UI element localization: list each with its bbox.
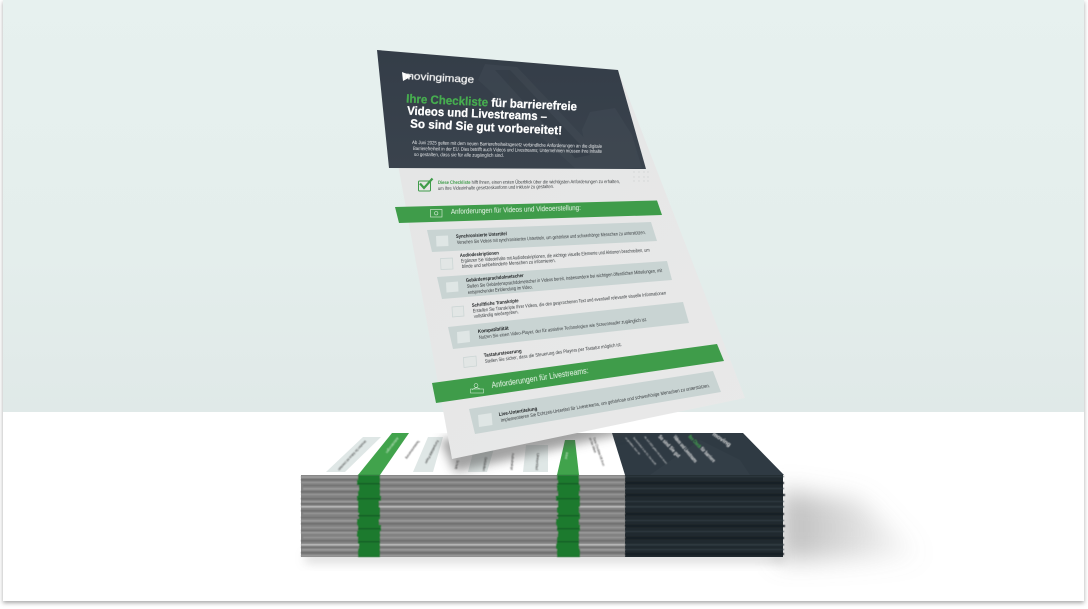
row: Kompatibilität: Nutzen Sie einen Video-Player, der für assistive Technologien wie Screenreader zugänglich ist. (479, 317, 647, 341)
row: Synchronisierte Untertitel (427, 222, 657, 252)
row: Schriftliche Transkripte: Erstellen Sie Transkripte Ihrer Videos, die den gesprochenen Text und eventuell relevante visuelle Informationen (473, 290, 667, 314)
row: Kompatibilität: Kompatibilität (478, 326, 509, 335)
paper stack (300, 433, 786, 558)
section band: videos (395, 200, 662, 223)
dark cover rotated text (624, 432, 732, 466)
intro paragraph (412, 140, 602, 159)
dark cover stripes (625, 476, 784, 550)
row: Live-Untertitelung (469, 371, 721, 434)
row: Tastatursteuerung: Stellen Sie sicher, dass die Steuerung des Players per Tastatur möglich ist. (485, 342, 622, 365)
dark cover rotated text: Ab Juni 2025 gelten mit dem neuen (643, 435, 669, 465)
row: Schriftliche Transkripte: Schriftliche Transkripte (472, 298, 519, 309)
top sheet rotated text: Untertitel (534, 453, 540, 470)
headline (406, 92, 578, 137)
header background image (478, 64, 642, 168)
dark cover rotated text: Barrierefreiheit in der EU. Dies betrifft (632, 436, 657, 466)
logo: movingimage (404, 70, 475, 86)
checklist intro text: um Ihre Videoinhalte gesetzeskonform und inklusiv zu gestalten. (438, 184, 554, 192)
top sheet rows (326, 437, 548, 472)
checkbox (478, 413, 492, 427)
row: Kompatibilität (448, 302, 689, 349)
stack top sheet: Anford (564, 452, 569, 459)
stack top sheet (326, 433, 784, 475)
top sheet rotated text (337, 437, 606, 471)
wall (3, 0, 1084, 412)
flyer header (377, 50, 646, 169)
floor shadows (305, 490, 925, 563)
checkbox (457, 330, 470, 344)
checkbox (464, 356, 476, 368)
flyer (377, 50, 745, 459)
dots decoration (633, 171, 649, 182)
row: Tastatursteuerung: Tastatursteuerung (484, 348, 522, 359)
headline: Videos und Livestreams – (407, 104, 548, 123)
row: Live-Untertitelung: Live-Untertitelung (498, 406, 538, 418)
top sheet rotated text: Versehen Sie Videos mit Untertiteln (337, 439, 367, 471)
dark cover rotated text: moving (711, 432, 732, 449)
row: Live-Untertitelung: Implementieren Sie Echtzeit-Untertitel für Livestreams, um gehörlose und schwerhörige Menschen zu unterstützen. (500, 383, 710, 424)
dark cover on top sheet (612, 433, 784, 475)
top sheet rotated text: Tastatursteuerung (405, 439, 420, 460)
top sheet rotated text: Gebärden (482, 457, 488, 471)
row: Synchronisierte Untertitel: Synchronisierte Untertitel (456, 231, 508, 240)
intro paragraph: Barrierefreiheit in der EU. Dies betrifft auch Videos und Livestreams; Unternehmen müssen ihre Inhalte (413, 146, 602, 155)
stack top sheet: Anforderungen (385, 436, 399, 454)
section band: livestreams: Anforderungen für Livestreams: (491, 366, 589, 390)
checkbox (440, 258, 453, 270)
icon: video screen (430, 210, 442, 217)
flyer shadow on stack (436, 433, 614, 475)
flyer paper (377, 50, 745, 459)
row: Audiodeskriptionen: Ergänzen Sie Videoinhalte mit Audiodeskriptionen, die wichtige visuelle Elemente und Aktionen beschreiben, um (461, 248, 650, 264)
icon: green checkbox (418, 178, 432, 191)
floor (3, 412, 1084, 601)
top sheet green bands (358, 433, 579, 475)
row: Tastatursteuerung (464, 342, 622, 368)
dark cover rotated text: Videos und Livestreams (671, 434, 698, 464)
row: Gebärdensprachdolmetscher (437, 261, 672, 299)
row: Gebärdensprachdolmetscher: Stellen Sie Gebärdensprachdolmetscher in Videos bereit, insbesondere bei wichtigen öffentlichen Mitteilungen, mit (467, 268, 663, 290)
top sheet rotated text: Schrift (454, 460, 460, 470)
top sheet rotated text: Kompatibilität Player (424, 440, 440, 465)
row: Schriftliche Transkripte: vollständig wiedergeben. (474, 309, 519, 320)
logo play icon (402, 72, 412, 81)
row: Synchronisierte Untertitel: Versehen Sie Videos mit synchronisierten Untertiteln, um gehörlose und schwerhörige Menschen zu unterstützen. (457, 230, 646, 246)
dark cover rotated text: Ihre Check (687, 434, 702, 450)
top sheet rotated text: Audiodeskript (510, 453, 515, 470)
checkbox (452, 306, 464, 317)
green band edge 1 (357, 475, 381, 557)
dark cover rotated text: für barriere (699, 446, 716, 464)
checkbox (446, 282, 458, 292)
row: Audiodeskriptionen (440, 248, 650, 270)
checklist intro text (438, 178, 620, 192)
top sheet rotated text: Diese Checkliste hilft Ihnen (592, 437, 606, 467)
section band: livestreams (432, 344, 724, 403)
dark cover rotated text: so gestalten, dass sie (624, 436, 642, 456)
page edge stripes (301, 475, 785, 557)
checkbox (436, 236, 448, 246)
icon: livestream person (470, 384, 484, 393)
row: Schriftliche Transkripte (452, 290, 667, 320)
intro paragraph: so gestalten, dass sie für alle zugänglich sind. (414, 152, 504, 159)
intro paragraph: Ab Juni 2025 gelten mit dem neuen Barrierefreiheitsgesetz verbindliche Anforderungen an die digitale (412, 140, 602, 150)
row: Gebärdensprachdolmetscher: Gebärdensprachdolmetscher (466, 273, 524, 284)
section band: videos: Anforderungen für Videos und Videoerstellung: (451, 203, 581, 216)
stack side: white pages (301, 475, 785, 557)
headline: Ihre Checkliste für barrierefreie (406, 92, 578, 114)
top sheet rotated text: um Ihre Videos (588, 437, 597, 454)
row: Audiodeskriptionen: Audiodeskriptionen (460, 250, 499, 259)
green band edge 2 (556, 475, 580, 557)
row: Audiodeskriptionen: blinde und sehbehinderte Menschen zu informieren. (462, 258, 556, 270)
headline: So sind Sie gut vorbereitet! (410, 117, 562, 137)
checklist intro text: Diese Checkliste hilft Ihnen, einen ersten Überblick über die wichtigsten Anforderungen zu erhalten, (438, 178, 620, 186)
row: Gebärdensprachdolmetscher: entsprechender Einblendung im Video. (468, 284, 533, 296)
dark cover rotated text: So sind Sie gut (657, 434, 681, 459)
